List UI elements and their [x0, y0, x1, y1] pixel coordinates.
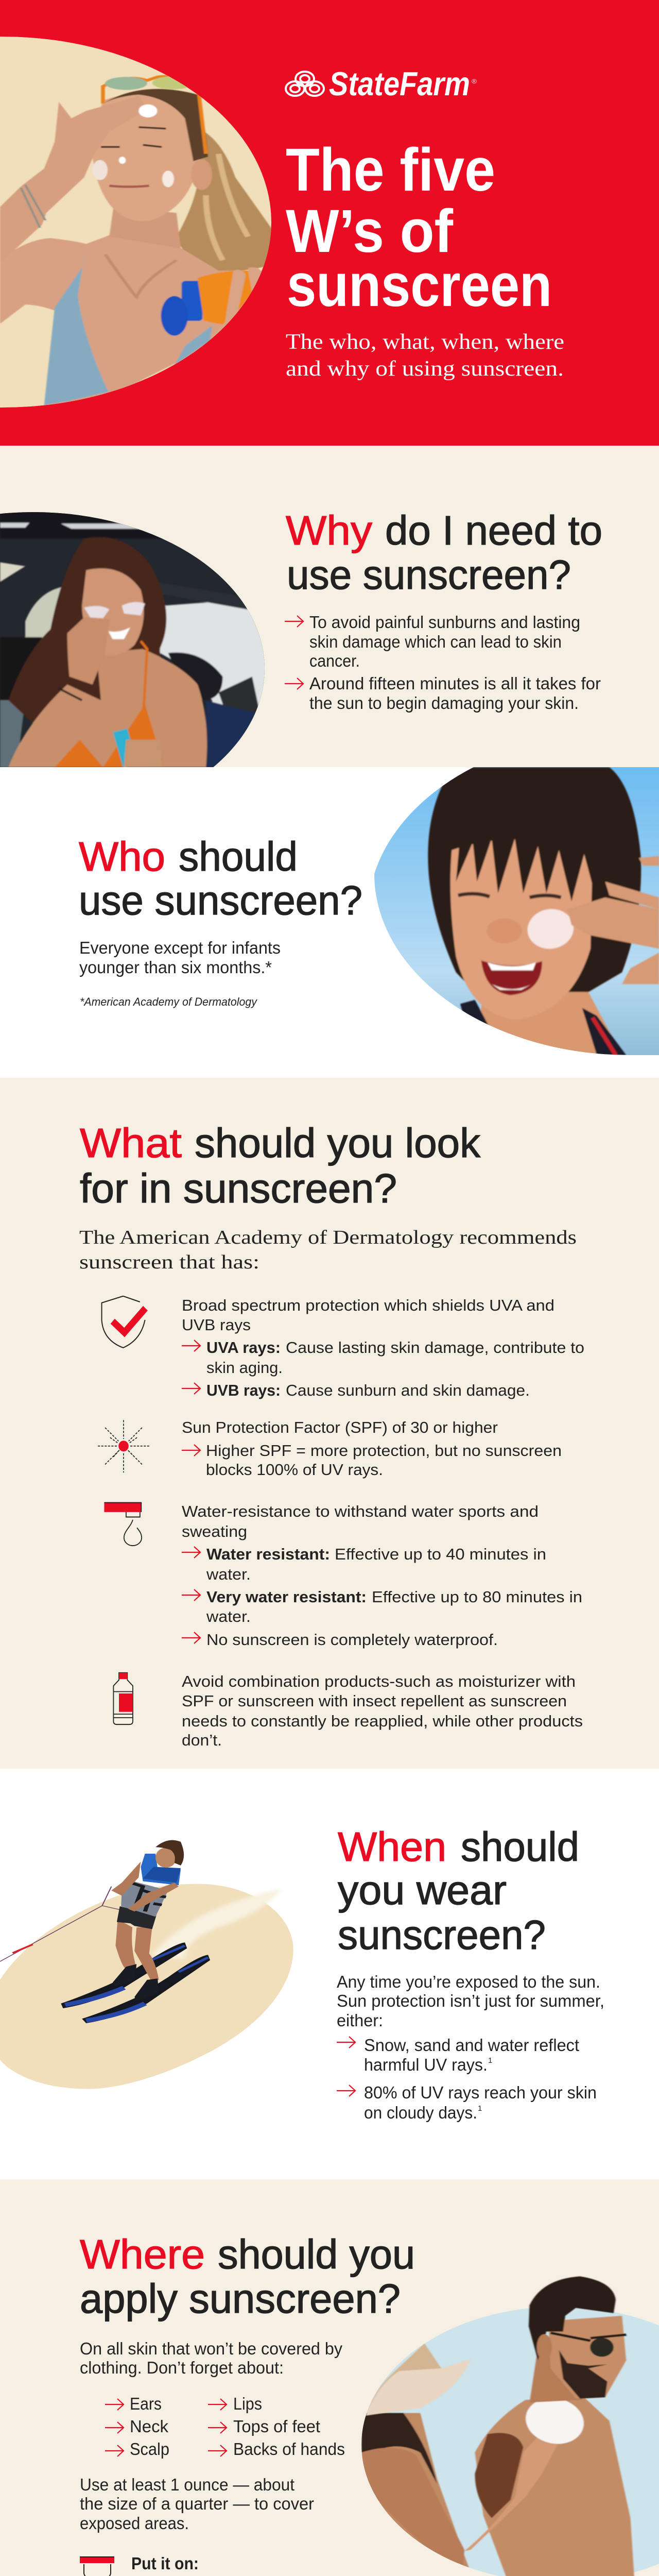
photo: woman applying sunscreen [0, 37, 273, 408]
heading [80, 1120, 481, 1211]
title: sunscreen [287, 251, 552, 319]
text block: put it on: Put it on: [131, 2554, 199, 2573]
item: combination products [113, 1673, 583, 1749]
item: water resistance: No sunscreen is completely waterproof. [206, 1631, 498, 1649]
list: exposures: 1 [488, 2056, 492, 2065]
intro text: sunscreen that has: [79, 1251, 259, 1273]
item: water resistance: Effective up to 80 minutes in [372, 1588, 582, 1606]
icon: faucet with drop [104, 1503, 142, 1546]
heading: should you look [195, 1120, 481, 1166]
list: reasons: the sun to begin damaging your skin. [309, 693, 579, 713]
text block: Sun protection isn’t just for summer, [337, 1991, 604, 2010]
item: combination products: SPF or sunscreen with insect repellent as sunscreen [182, 1692, 567, 1710]
item: water resistance: Very water resistant: [206, 1588, 367, 1606]
item: SPF [98, 1419, 562, 1479]
title: W’s of [286, 197, 454, 265]
text block: On all skin that won’t be covered by [80, 2339, 342, 2358]
photo: child with sunscreen on cheek [371, 767, 659, 1058]
heading: Why [286, 507, 372, 553]
heading: use sunscreen? [287, 552, 571, 598]
text block [80, 2339, 342, 2377]
heading: should [179, 834, 298, 879]
list: body areas: Scalp [130, 2439, 169, 2459]
item: broad spectrum: Cause sunburn and skin damage. [286, 1382, 530, 1399]
title [286, 136, 552, 319]
icon: sun [98, 1420, 150, 1472]
icon: bottle [113, 1673, 133, 1724]
item: broad spectrum: Cause lasting skin damage, contribute to [286, 1339, 584, 1357]
list: exposures: 80% of UV rays reach your skin [364, 2083, 597, 2102]
list: body areas: Backs of hands [233, 2439, 345, 2459]
text block: quantity: the size of a quarter — to cover [80, 2494, 314, 2513]
heading: for in sunscreen? [80, 1165, 397, 1211]
heading: should [461, 1824, 579, 1870]
list: body areas: Neck [130, 2417, 168, 2436]
illustration: water skier on beige blob [0, 1840, 293, 2089]
text block: clothing. Don’t forget about: [80, 2358, 284, 2377]
heading [286, 507, 602, 598]
list: reasons: cancer. [309, 651, 360, 670]
list: exposures [337, 2036, 597, 2122]
item: combination products: don’t. [182, 1732, 222, 1749]
subtitle [286, 330, 564, 381]
panel: what [0, 1078, 659, 1769]
intro text: The American Academy of Dermatology recommends [79, 1227, 577, 1248]
shorts [117, 1906, 157, 1929]
heading: sunscreen? [338, 1912, 546, 1958]
icon: three ovals [286, 72, 324, 96]
footnote: *American Academy of Dermatology [80, 995, 258, 1008]
rope [0, 1887, 130, 1961]
subtitle: The who, what, when, where [286, 330, 564, 354]
photo: woman applying sunscreen to man's shoulder [361, 2276, 659, 2576]
heading: When [338, 1824, 446, 1870]
heading: What [80, 1120, 182, 1166]
heading [338, 1824, 579, 1958]
list: reasons: To avoid painful sunburns and lasting [309, 613, 580, 632]
panel: where [0, 2179, 659, 2576]
heading [80, 2231, 415, 2321]
item: water resistance: water. [206, 1608, 251, 1625]
logo: State Farm: StateFarm [329, 65, 470, 103]
title: The five [286, 136, 495, 204]
panel: when [0, 1769, 659, 2179]
text block [79, 938, 281, 977]
item: water resistance: Effective up to 40 minutes in [335, 1546, 546, 1563]
icon: hourglass [80, 2556, 115, 2576]
item: SPF: blocks 100% of UV rays. [206, 1461, 383, 1479]
list: body areas: Ears [130, 2394, 162, 2413]
item: water resistance: Water-resistance to withstand water sports and [182, 1503, 539, 1520]
photo: woman with sunscreen under eyes [0, 510, 269, 771]
list: reasons: skin damage which can lead to skin [309, 632, 562, 651]
item: broad spectrum: UVA rays: [206, 1339, 281, 1357]
heading: Where [80, 2231, 205, 2277]
list: reasons: Around fifteen minutes is all it takes for [309, 674, 601, 693]
legs [115, 1920, 159, 1981]
head [155, 1848, 177, 1868]
item: water resistance [104, 1503, 582, 1649]
heading: Who [79, 834, 165, 879]
item: SPF: Sun Protection Factor (SPF) of 30 or higher [182, 1419, 498, 1436]
vest [121, 1880, 168, 1917]
item: water resistance: water. [206, 1566, 251, 1583]
item: combination products: Avoid combination products-such as moisturizer with [182, 1673, 576, 1690]
heading: do I need to [385, 507, 602, 553]
item: water resistance: Water resistant: [206, 1546, 330, 1563]
list: exposures: harmful UV rays. [364, 2055, 488, 2074]
list: exposures: on cloudy days. [364, 2103, 477, 2122]
icon: shield with check [102, 1296, 145, 1348]
item: broad spectrum: UVB rays [182, 1316, 251, 1334]
logo: State Farm: ® [472, 78, 477, 85]
list: exposures: Snow, sand and water reflect [364, 2036, 579, 2055]
list: body areas [105, 2394, 345, 2459]
intro text [79, 1227, 577, 1273]
text block: younger than six months.* [79, 958, 272, 977]
item: broad spectrum: Broad spectrum protection which shields UVA and [182, 1297, 554, 1314]
heading: use sunscreen? [79, 877, 362, 923]
item: SPF: Higher SPF = more protection, but no sunscreen [206, 1442, 562, 1460]
text block: quantity [80, 2475, 314, 2533]
item: water resistance: sweating [182, 1523, 247, 1540]
heading: apply sunscreen? [80, 2276, 401, 2321]
item: broad spectrum: skin aging. [206, 1359, 283, 1377]
panel: why [0, 446, 659, 771]
list: exposures: 1 [478, 2104, 482, 2113]
text block: quantity: Use at least 1 ounce — about [80, 2475, 294, 2494]
panel: who [0, 767, 659, 1078]
item: broad spectrum [102, 1296, 584, 1399]
text block: quantity: exposed areas. [80, 2514, 189, 2533]
arms [111, 1861, 179, 1911]
list: body areas: Tops of feet [233, 2417, 320, 2436]
item: broad spectrum: UVB rays: [206, 1382, 281, 1399]
item: combination products: needs to constantly be reapplied, while other products [182, 1713, 583, 1730]
heading [79, 834, 362, 923]
text block: either: [337, 2011, 383, 2030]
subtitle: and why of using sunscreen. [286, 357, 564, 381]
heading: you wear [338, 1867, 507, 1913]
skis [61, 1942, 187, 2008]
text block [337, 1972, 604, 2030]
heading: should you [218, 2231, 415, 2277]
list: body areas: Lips [233, 2394, 262, 2413]
list: reasons [285, 613, 601, 713]
text block: Everyone except for infants [79, 938, 281, 957]
text block: Any time you’re exposed to the sun. [337, 1972, 600, 1991]
panel: hero [0, 0, 659, 446]
